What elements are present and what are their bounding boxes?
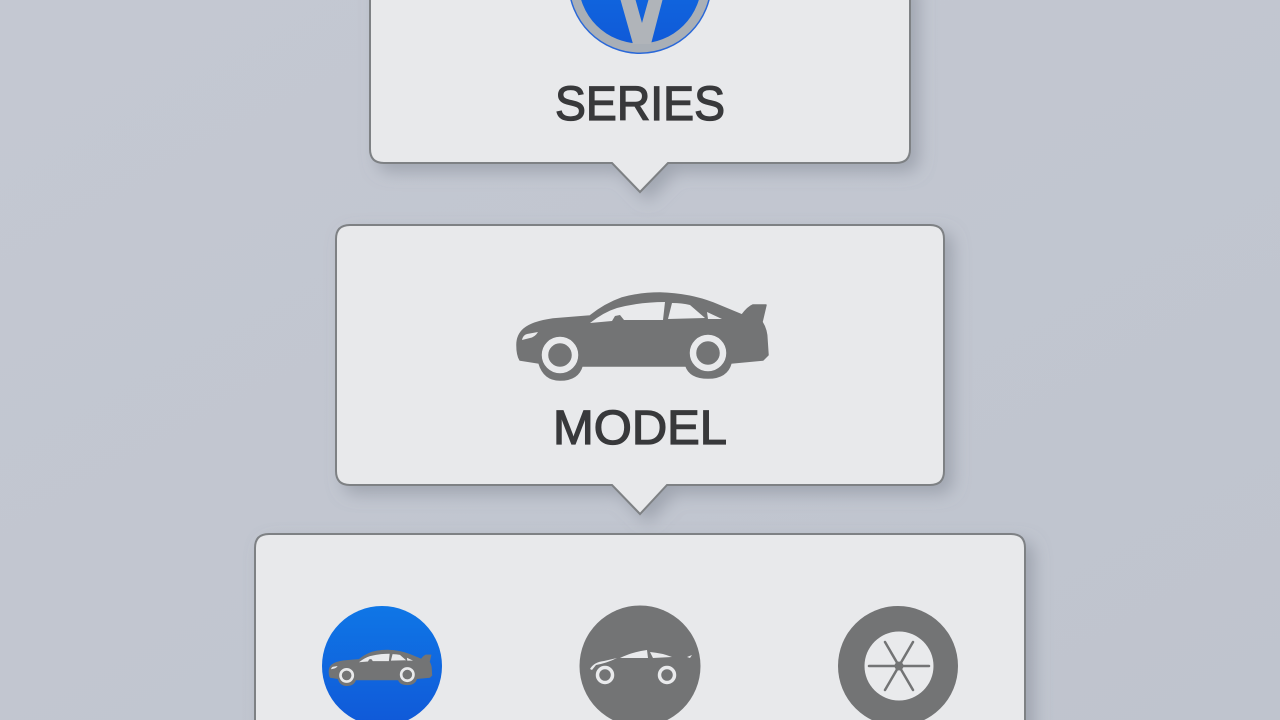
heading: series: SERIES xyxy=(555,78,725,131)
panel: model xyxy=(336,225,944,514)
icon: wheel option xyxy=(838,606,958,720)
icon: blue V logo xyxy=(568,0,712,54)
panel: series xyxy=(370,0,910,192)
panel: options xyxy=(255,534,1025,720)
icon: gray car silhouette option xyxy=(580,606,700,720)
icon: car side view xyxy=(517,293,768,380)
heading: model: MODEL xyxy=(553,402,727,455)
icon: blue car option xyxy=(322,606,442,720)
